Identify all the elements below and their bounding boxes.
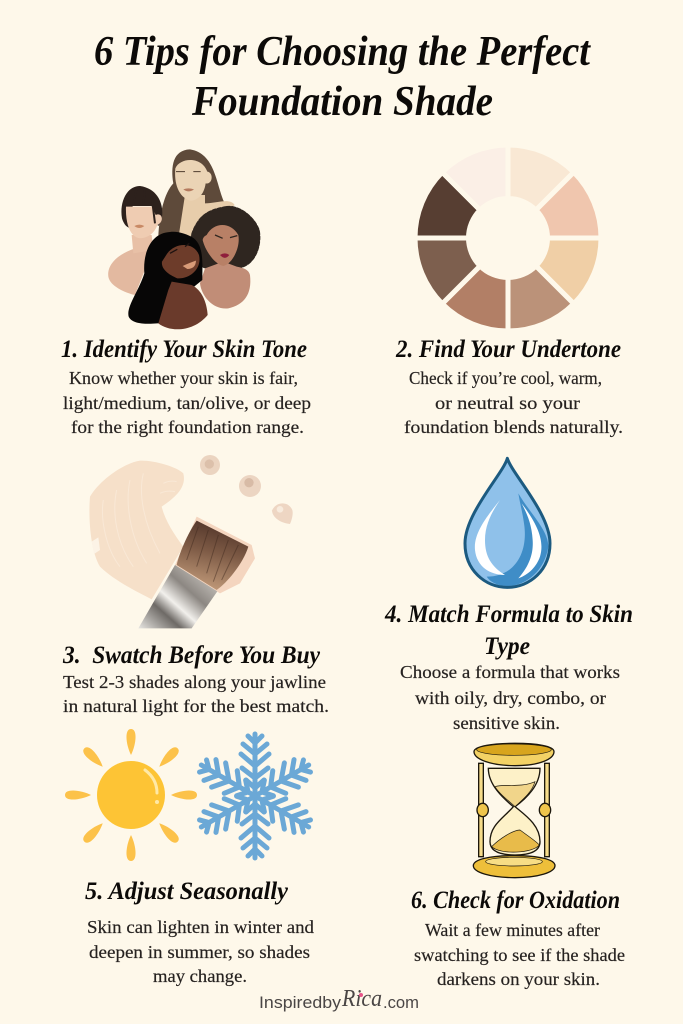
text block: Choose a formula that works xyxy=(400,662,620,682)
text block xyxy=(400,662,620,733)
text block: or neutral so your xyxy=(435,393,580,413)
heading: 6. Check for Oxidation xyxy=(411,887,620,914)
text block: Wait a few minutes after xyxy=(425,920,600,940)
text block: may change. xyxy=(153,966,247,986)
text block: Test 2-3 shades along your jawline xyxy=(63,672,326,692)
icon: water drop xyxy=(465,458,550,587)
text block: sensitive skin. xyxy=(453,713,560,733)
footer logo: Inspiredby xyxy=(259,994,342,1012)
heading: 2. Find Your Undertone xyxy=(395,336,621,363)
text block: Skin can lighten in winter and xyxy=(87,917,314,937)
icon: hourglass xyxy=(473,743,555,878)
text block xyxy=(414,920,625,989)
icon: four women of different skin tones xyxy=(108,149,259,329)
panel: tip 5 adjust seasonally xyxy=(65,729,316,986)
text block: light/medium, tan/olive, or deep xyxy=(63,393,311,413)
text block: in natural light for the best match. xyxy=(63,696,329,716)
footer logo: Rica xyxy=(341,986,382,1012)
heading: 5. Adjust Seasonally xyxy=(85,878,289,905)
panel: tip 2 find undertone xyxy=(395,145,623,437)
text block: for the right foundation range. xyxy=(71,417,304,437)
text block: Know whether your skin is fair, xyxy=(69,368,298,388)
icon: foundation swatch and brush xyxy=(89,455,293,628)
panel: tip 3 swatch xyxy=(62,455,329,716)
text block: Check if you’re cool, warm, xyxy=(409,368,602,388)
panel: tip 1 identify skin tone xyxy=(61,149,311,437)
heading: Type xyxy=(484,633,530,660)
footer logo xyxy=(259,986,419,1012)
title: Foundation Shade xyxy=(191,79,493,125)
heading: 4. Match Formula to Skin xyxy=(384,601,633,628)
icon: snowflake xyxy=(194,734,316,858)
panel: tip 4 match formula xyxy=(384,458,633,733)
text block xyxy=(63,368,311,437)
text block xyxy=(63,672,329,716)
heading xyxy=(384,601,633,660)
heading: 3. Swatch Before You Buy xyxy=(62,642,321,669)
title: 6 Tips for Choosing the Perfect xyxy=(94,29,591,75)
heading: 1. Identify Your Skin Tone xyxy=(61,336,307,363)
panel: tip 6 check oxidation xyxy=(411,743,625,989)
text block: deepen in summer, so shades xyxy=(89,942,310,962)
text block xyxy=(404,368,623,437)
icon: skin tone colour wheel xyxy=(415,145,601,331)
text block: foundation blends naturally. xyxy=(404,417,623,437)
text block: swatching to see if the shade xyxy=(414,945,625,965)
text block xyxy=(87,917,314,986)
footer logo: .com xyxy=(383,994,419,1012)
icon: sun xyxy=(65,729,197,861)
text block: darkens on your skin. xyxy=(437,969,600,989)
text block: with oily, dry, combo, or xyxy=(415,688,606,708)
title xyxy=(94,29,591,125)
